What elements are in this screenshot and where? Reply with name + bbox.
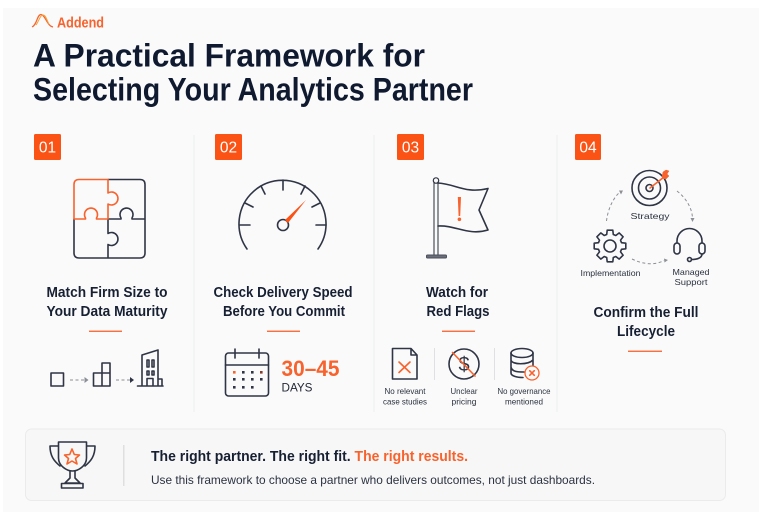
icon: speedometer <box>239 180 326 249</box>
stat: 30-45 days: 30–45 <box>282 356 340 381</box>
panel 1: match firm size <box>34 134 168 386</box>
stat: 30-45 days <box>282 356 340 394</box>
footer banner <box>26 429 726 500</box>
flag item: no case studies: No relevant <box>384 386 426 396</box>
flag item: no governance <box>498 348 551 406</box>
flag item: unclear pricing: $ <box>458 354 470 376</box>
flag item: no governance: mentioned <box>505 396 543 406</box>
panel 4: lifecycle <box>575 134 710 352</box>
icon: managed support headset: Managed <box>672 267 710 277</box>
icon: managed support headset: Support <box>674 277 708 287</box>
title: Selecting Your Analytics Partner <box>33 72 473 108</box>
panel 3: red flags <box>383 134 551 406</box>
badge 02: 02 <box>220 140 237 157</box>
heading: Confirm the Full <box>594 305 698 321</box>
flag item: unclear pricing: pricing <box>452 396 477 406</box>
heading: Before You Commit <box>223 304 345 320</box>
title <box>33 38 473 108</box>
heading <box>594 305 698 340</box>
badge 03 <box>397 134 424 160</box>
stat: 30-45 days: DAYS <box>282 380 312 394</box>
heading: Match Firm Size to <box>46 285 168 301</box>
badge 01 <box>34 134 61 160</box>
icon: implementation gear: Implementation <box>580 268 641 278</box>
banner subtext: Use this framework to choose a partner who delivers outcomes, not just dashboards. <box>151 473 595 487</box>
cycle arrows <box>606 190 694 264</box>
logo: Addend: Addend <box>57 14 104 32</box>
flag item: no case studies <box>383 348 427 406</box>
heading: Red Flags <box>426 304 490 320</box>
icon: growth from box to building <box>51 350 163 386</box>
heading <box>214 285 352 320</box>
icon: trophy <box>50 442 95 488</box>
badge 03: 03 <box>402 140 419 157</box>
badge 01: 01 <box>39 140 56 157</box>
panel 2: delivery speed <box>214 134 352 396</box>
banner headline: The right partner. The right fit. The right results. <box>151 448 468 465</box>
badge 04 <box>575 134 601 160</box>
title: A Practical Framework for <box>33 38 425 74</box>
badge 02 <box>215 134 242 160</box>
icon: calendar <box>226 349 268 396</box>
heading <box>46 285 168 320</box>
heading: Watch for <box>426 285 488 301</box>
heading: Lifecycle <box>617 324 675 340</box>
flag item: no governance: No governance <box>498 386 551 396</box>
icon: flag <box>426 178 488 258</box>
icon: puzzle <box>74 180 145 258</box>
badge 04: 04 <box>579 140 597 157</box>
icon: managed support headset <box>672 228 710 287</box>
heading <box>426 285 490 320</box>
logo: Addend <box>32 14 104 32</box>
icon: strategy target <box>630 170 670 221</box>
flag item: no case studies: case studies <box>383 396 427 406</box>
icon: strategy target: Strategy <box>630 211 670 221</box>
icon: implementation gear <box>580 230 641 278</box>
flag item: unclear pricing <box>449 349 479 406</box>
heading: Check Delivery Speed <box>214 285 352 301</box>
flag item: unclear pricing: Unclear <box>450 386 478 396</box>
heading: Your Data Maturity <box>46 304 168 320</box>
